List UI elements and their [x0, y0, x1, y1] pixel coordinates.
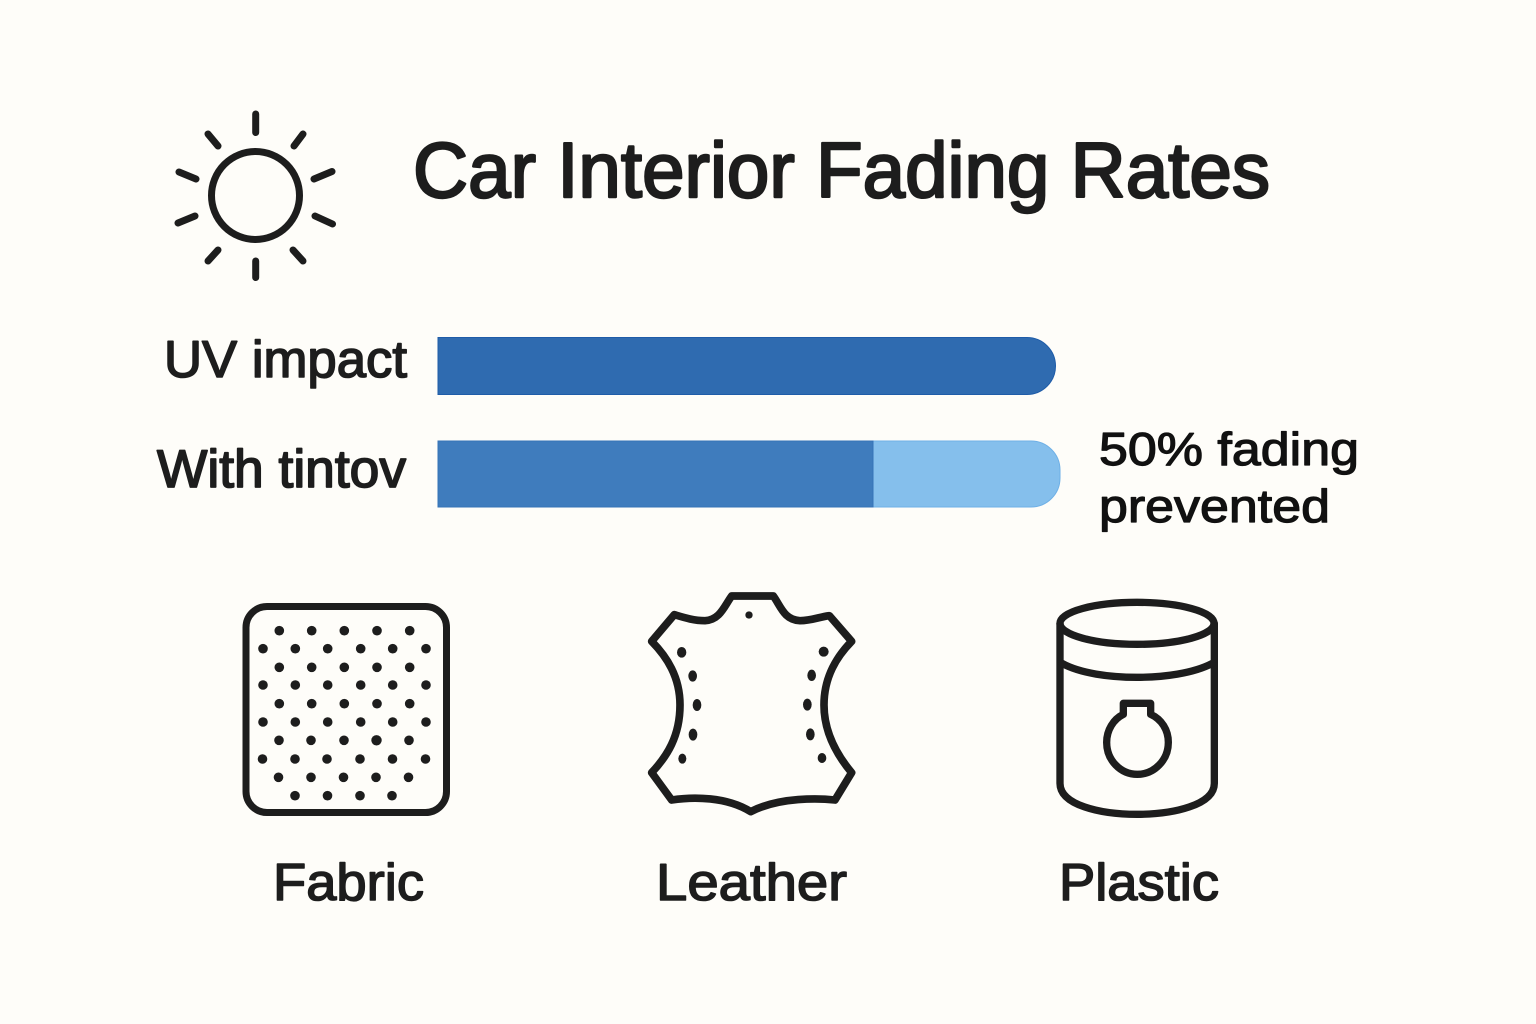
label: With tintov: With tintov: [157, 440, 406, 499]
icon: leather hide: [652, 596, 852, 812]
icon: sun: [178, 114, 332, 278]
label: UV impact: UV impact: [164, 331, 408, 389]
label: Fabric: Fabric: [273, 854, 424, 912]
bar: UV impact: [438, 338, 1056, 394]
callout: 50% fading prevented: prevented: [1099, 480, 1330, 532]
label: Plastic: Plastic: [1059, 854, 1219, 912]
bar segment: dark portion: [438, 441, 873, 507]
label: Leather: Leather: [656, 854, 847, 912]
callout: 50% fading prevented: 50% fading: [1099, 423, 1359, 475]
icon: fabric: [246, 606, 446, 812]
title: Car Interior Fading Rates: [413, 126, 1270, 214]
bar: with tint: [438, 441, 1060, 507]
bar segment: light remainder: [873, 441, 1060, 507]
callout: 50% fading prevented: [1099, 423, 1359, 532]
icon: plastic container: [1060, 602, 1214, 814]
